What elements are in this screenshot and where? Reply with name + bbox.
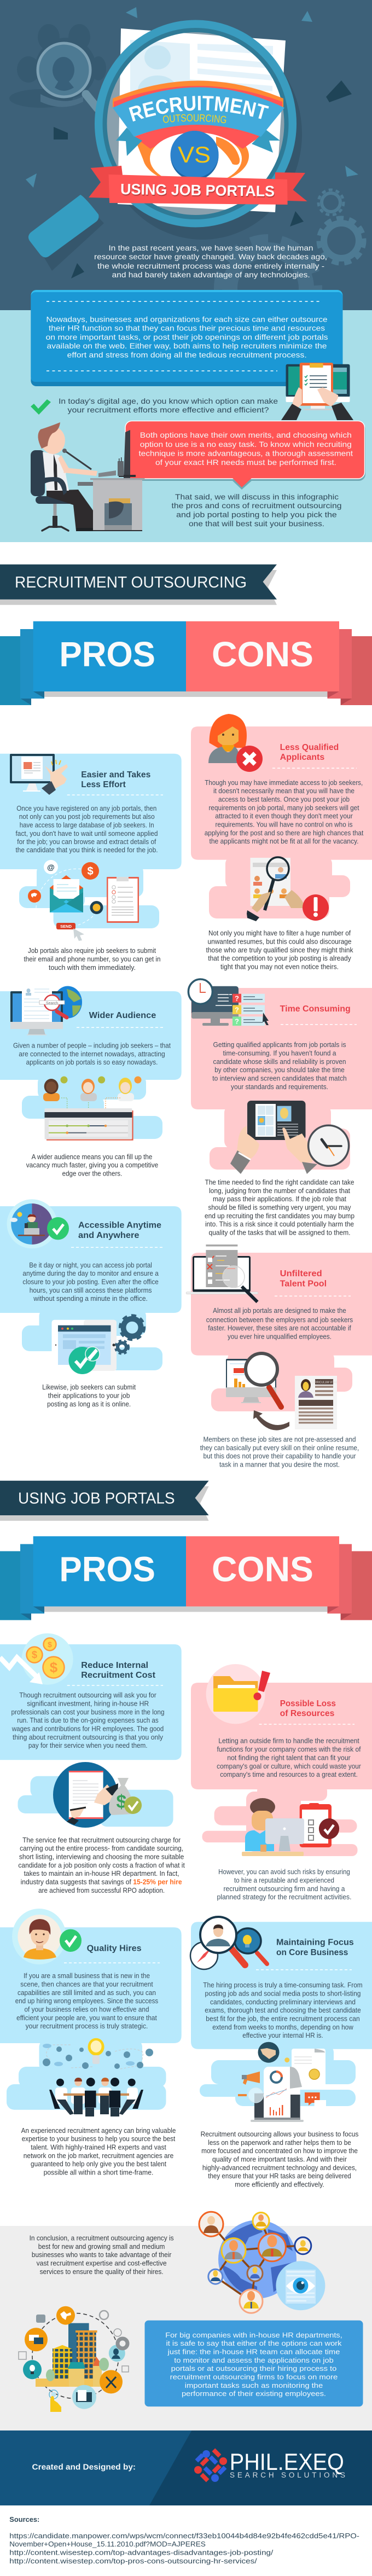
text: description <box>205 779 364 845</box>
text: description: candidate whose skills and reliability is proven <box>213 1058 346 1066</box>
panel: pros and cons banner two <box>0 1536 372 1620</box>
text: heading: on Core Business <box>276 1948 348 1957</box>
text: follow-up: Members on these job sites are not pre-assessed and <box>204 1435 356 1443</box>
text: description: If you are a small business that is new in the <box>24 1972 150 1980</box>
panel: blue big companies box: just fine: the in-house HR team can allocate time <box>167 2348 340 2356</box>
icon: magnifiers with executive, bulb and compass <box>190 1917 267 1969</box>
text: follow-up with savings highlight: are achieved from successful RPO adoption. <box>38 1887 165 1894</box>
text: follow-up: quality of the tasks that will be assigned to them. <box>209 1229 350 1236</box>
text: description: requirements. You will have no control on who is <box>216 821 352 828</box>
text block: digital age question: your recruitment efforts more effective and efficient? <box>68 405 269 414</box>
text: description: requirements on job portal, many job seekers will get <box>209 804 359 812</box>
title: ribbon with recruitment outsourcing <box>113 81 284 178</box>
text: follow-up with savings highlight: The service fee that recruitment outsourcing charge for <box>22 1836 181 1844</box>
icon: woman with cross <box>208 714 263 772</box>
icon: folder with alert <box>206 1664 270 1724</box>
text: follow-up <box>26 1153 158 1177</box>
text: follow-up: into. This is a risk since it could potentially harm the <box>205 1220 354 1228</box>
text: follow-up <box>42 1383 136 1408</box>
text: description <box>206 1307 353 1340</box>
text block: sources: https://candidate.manpower.com/wps/wcm/connect/f33eb10044b4d84e92b4fe462cdd5e41/RPO- <box>9 2532 359 2540</box>
text block: sources: November+Open+House_15.11.2010.pdf?MOD=AJPERES <box>9 2540 206 2548</box>
panel: con time consuming <box>188 979 372 1236</box>
text: heading: Possible Loss <box>280 1699 336 1708</box>
text: follow-up: but this does not prove their capability to handle your <box>204 1452 356 1460</box>
text: description: the candidate that you think is needed for the job. <box>15 846 158 854</box>
text block: intro paragraph: resource sector have greatly changed. Way back decades ago, <box>94 252 327 261</box>
icon: email, clipboard and send button <box>28 860 139 941</box>
panel: pros and cons banner one: PROS <box>59 635 155 674</box>
text: description: functions for your company comes with the risk of <box>217 1746 361 1753</box>
text: heading: Maintaining Focus <box>276 1938 354 1947</box>
text: description: best fit for the job, the entire recruitment process can <box>206 2015 360 2023</box>
panel: blue intro card: Nowadays, businesses and organizations for each size can either outsource <box>46 315 328 324</box>
text: description: you ever hire unqualified employees. <box>228 1333 332 1340</box>
panel: red speech bubble <box>125 421 365 490</box>
text: description: faster. However, these sites are not accountable if <box>208 1324 351 1332</box>
panel: credits footer <box>0 2430 372 2505</box>
panel: credits footer: SEARCH SOLUTIONS <box>230 2471 345 2479</box>
text block: that said <box>172 492 341 528</box>
text: follow-up: long, judging from the number of candidates that <box>209 1187 350 1195</box>
text: description: time-consuming. If you haven't found a <box>223 1049 336 1057</box>
text: heading: Reduce Internal <box>81 1661 148 1670</box>
icon: call agents <box>43 1077 141 1101</box>
text: follow-up: network on the job market, recruitment agencies are <box>24 2152 173 2160</box>
icon: monitor and clipboard with hands <box>281 363 353 420</box>
title: ribbon with recruitment outsourcing: OUTSOURCING <box>163 114 226 124</box>
text: follow-up: they ensure that your HR tasks are being delivered <box>208 2172 351 2180</box>
text: heading <box>280 1269 327 1289</box>
text: heading: Wider Audience <box>89 1011 156 1020</box>
text: follow-up: unwanted resumes, but this could also discourage <box>208 938 352 945</box>
icon: phil.exeq logo <box>194 2449 227 2482</box>
text: heading <box>276 1938 354 1957</box>
text: description: applicants on job portals is so easy nowadays. <box>26 1059 158 1066</box>
panel: blue intro card: on more important tasks, or post their job openings on different job portals <box>46 333 328 341</box>
icon: coins with falling arrow: $ <box>48 1640 52 1649</box>
text: heading: Unfiltered <box>280 1269 322 1278</box>
text: heading: of Resources <box>280 1709 334 1718</box>
text: follow-up with savings highlight: industry data suggests that savings of 15-25% per hire <box>21 1879 182 1886</box>
text: follow-up: posting as long as it is online. <box>47 1400 131 1408</box>
panel: blue big companies box: For big companies with in-house HR departments, <box>165 2331 342 2339</box>
decorative triangles <box>26 7 358 278</box>
panel: blue intro card: available on the web. Either way, both aims to help recruiters minimize the <box>47 341 327 350</box>
panel: blue big companies box: performance of their existing employees. <box>182 2389 326 2398</box>
text: follow-up <box>206 929 353 970</box>
text: description: thing about recruitment outsourcing is that you only <box>13 1734 164 1741</box>
text block: digital age question: In today's digital age, do you know which option can make <box>59 397 278 405</box>
panel: red speech bubble: option to use is a no easy task. To know which recruiting <box>140 440 352 449</box>
title: ribbon with recruitment outsourcing: RECRUITMENT <box>129 96 269 121</box>
text: description: wages and contributions for HR employees. The good <box>11 1725 164 1733</box>
text block: sources: http://content.wisestep.com/top-advantages-disadvantages-job-posting/ <box>9 2549 274 2557</box>
text: follow-up: vacancy much faster, giving you a competitive <box>26 1161 158 1169</box>
panel: credits footer: Created and Designed by: <box>32 2463 136 2472</box>
text: description <box>13 1042 171 1066</box>
text: description: capabilities are still limited and as such, you can <box>18 1989 156 1997</box>
text: description <box>22 1261 159 1302</box>
panel: blue intro card: effort and stress from doing all the tedious recruitment process. <box>67 350 307 359</box>
icon: magnifier over candidate resumes <box>247 857 329 921</box>
text: description: posting job ads and social media posts to short-listing <box>205 1990 361 1998</box>
text: description: Though recruitment outsourcing will ask you for <box>19 1691 156 1699</box>
text: description <box>15 805 158 854</box>
panel: red speech bubble: Both options have their own merits, and choosing which <box>140 431 352 439</box>
text: description: your recruitment process is truly strategic. <box>26 2022 148 2030</box>
heading: recruitment outsourcing banner <box>0 565 277 605</box>
text: description: the applicants might not be fit at all for the vacancy. <box>209 838 359 845</box>
text block: that said: and job portal posting to help you pick the <box>176 510 337 519</box>
icon: clock, monitor and question list: ? <box>235 1005 239 1014</box>
text: follow-up: that the competition to your job posting is already <box>208 955 351 962</box>
text: heading: Applicants <box>280 753 324 762</box>
text: follow-up: planned strategy for the recruitment activities. <box>217 1893 351 1901</box>
text: heading: Less Qualified <box>280 743 339 752</box>
text: follow-up: task in a manner that you desire the most. <box>219 1461 340 1468</box>
text block: sources: Sources: <box>9 2516 39 2523</box>
icon: coins with falling arrow: $ <box>50 1659 58 1676</box>
panel: pro maintaining focus on core business <box>190 1917 372 2188</box>
panel: blue big companies box <box>144 2321 363 2406</box>
text: follow-up: recruitment outsourcing firm and having a <box>223 1885 345 1893</box>
text: description: to interview and screen candidates that match <box>212 1074 347 1082</box>
icon: day and night with check <box>7 1199 69 1248</box>
text: heading <box>81 770 150 789</box>
text: description <box>11 1691 165 1749</box>
panel: header background <box>0 0 372 310</box>
text: description: have access to large database of job seekers. In <box>20 822 154 829</box>
text: follow-up: end up recruiting the first candidates you may bump <box>205 1212 354 1220</box>
text: description: your standards and requirements. <box>231 1083 328 1091</box>
text: description: attracted to it even though they don't meet your <box>215 812 353 820</box>
text: follow-up: An experienced recruitment agency can bring valuable <box>21 2127 176 2135</box>
panel: pro quality hires <box>0 1909 182 2176</box>
text: follow-up: However, you can avoid such risks by ensuring <box>218 1868 350 1876</box>
text block: that said: one that will best suit your business. <box>189 519 324 528</box>
text: description: Once you have registered on any job portals, then <box>16 805 156 812</box>
text: follow-up <box>200 1435 359 1468</box>
icon: clock, monitor and question list <box>188 979 269 1026</box>
text: follow-up: their email and phone number, so you can get in <box>24 955 161 963</box>
icon: man on phone at desk <box>31 422 144 531</box>
icon: worker at monitor with checklist <box>242 1792 339 1856</box>
text: heading <box>280 1699 336 1718</box>
text block: intro paragraph <box>94 243 327 279</box>
text: follow-up: Likewise, job seekers can submit <box>42 1383 136 1391</box>
text: follow-up <box>24 947 161 972</box>
text: heading: Time Consuming <box>280 1004 351 1014</box>
text: description: are connected to the internet nowadays, attracting <box>19 1050 165 1058</box>
panel: con possible loss of resources <box>191 1664 372 1901</box>
text block: conclusion: services to ensure the quality of their hires. <box>40 2268 164 2276</box>
text: heading: Talent Pool <box>280 1279 327 1289</box>
text: heading <box>78 1221 161 1240</box>
icon: laptop with checklist and magnifier <box>186 1245 258 1302</box>
text: description: by other companies, you should take the time <box>214 1066 345 1074</box>
icon: monitor with globe and search <box>10 986 82 1035</box>
text: follow-up: tight that you may not even notice theirs. <box>220 963 339 970</box>
text: heading: Quality Hires <box>87 1944 142 1953</box>
text: follow-up: more efficiently and effectively. <box>235 2180 324 2188</box>
icon: green check <box>31 399 51 415</box>
panel: con unfiltered talent pool <box>186 1245 372 1468</box>
icon: contract signing and money bag: $ <box>117 1792 127 1812</box>
text block: that said: That said, we will discuss in this infographic <box>175 492 339 501</box>
icon: email, clipboard and send button: SEND <box>60 924 72 929</box>
icon: background gears <box>214 188 367 290</box>
icon: tablet with candidate photos and clock <box>230 1101 349 1174</box>
panel: pro reduce internal recruitment cost <box>0 1633 185 1894</box>
text: description: efficient your people are, you want to ensure that <box>16 2014 157 2022</box>
heading: using job portals banner <box>0 1481 209 1521</box>
text: follow-up with savings highlight: takes to maintain an in-house HR department. In fact, <box>24 1870 179 1877</box>
text: follow-up: to hire a reputable and experienced <box>234 1876 334 1884</box>
panel: con less qualified applicants <box>191 714 372 970</box>
icon: people silhouettes with magnifier <box>9 24 106 108</box>
icon: coins with falling arrow: $ <box>32 1649 37 1660</box>
text: follow-up: talent. With highly-trained HR experts and vast <box>31 2143 166 2151</box>
text: description: company's goal or culture, which could waste your <box>217 1763 361 1770</box>
panel: pro wider audience <box>0 986 182 1177</box>
panel: pros and cons banner one <box>0 621 372 705</box>
text: heading <box>81 1661 155 1680</box>
text: heading <box>280 743 339 762</box>
icon: email, clipboard and send button: $ <box>87 865 94 877</box>
text: description: The hiring process is truly a time-consuming task. From <box>203 1981 363 1989</box>
icon: smiling hire with check <box>12 1909 82 1964</box>
text: description: significant investment, hiring in-house HR <box>27 1700 149 1708</box>
text: follow-up <box>205 1178 354 1236</box>
text: heading: Easier and Takes <box>81 770 150 780</box>
text: follow-up with savings highlight: carrying out the entire process- from candidate sourcing, <box>20 1845 183 1852</box>
text: follow-up: expertise to your business to help you source the best <box>22 2135 176 2143</box>
heading: using job portals banner: USING JOB PORTALS <box>18 1490 175 1508</box>
panel: blue big companies box: important tasks such as monitoring the <box>185 2381 323 2389</box>
icon: monitor, magnifier and resume <box>226 1353 338 1431</box>
icon: clock, monitor and question list: ? <box>235 1017 239 1025</box>
text: heading: and Anywhere <box>78 1231 140 1240</box>
text block: intro paragraph: the whole recruitment process was done entirely internally - <box>97 261 324 270</box>
icon: email, clipboard and send button: @ <box>47 863 55 871</box>
panel: blue intro card <box>31 290 342 386</box>
text: description: Almost all job portals are designed to make the <box>213 1307 346 1315</box>
text: description: closure to your job posting. Even after the office <box>22 1278 159 1286</box>
text block: conclusion: best for new and growing small and medium <box>38 2243 165 2251</box>
icon: contract signing and money bag <box>53 1762 142 1828</box>
text: description: end up hiring wrong employees. Since the success <box>15 1997 158 2005</box>
text: description: fact, you don't have to wait until someone applied <box>15 830 158 838</box>
text: description <box>217 1737 361 1778</box>
text: description: run. That is due to the on-going expenses such as <box>17 1717 159 1724</box>
text: description: anytime during the day to monitor and ensure a <box>22 1270 159 1277</box>
icon: lightbulb network over team meeting <box>43 2038 153 2116</box>
icon: city with service circle <box>19 2306 129 2412</box>
panel: pros and cons banner two: PROS <box>59 1550 155 1589</box>
text: description: connection between the employers and job seekers <box>206 1316 353 1324</box>
panel: light blue intro background <box>0 310 372 542</box>
text: follow-up: Not only you might have to filter a huge number of <box>208 929 351 937</box>
text block: conclusion: In conclusion, a recruitment outsourcing agency is <box>30 2234 174 2242</box>
icon: vs badge <box>171 131 219 181</box>
text block: intro paragraph: and had barely taken advantage of any technologies. <box>112 270 310 279</box>
text: follow-up: possible all within a short time-frame. <box>44 2168 153 2176</box>
panel: pro easier and takes less effort <box>0 754 182 972</box>
text: description: Getting qualified applicants from job portals is <box>213 1041 346 1049</box>
text: follow-up: Job portals also require job seekers to submit <box>28 947 156 955</box>
text: description <box>15 1972 158 2030</box>
text: follow-up: more focused and concentrated on how to improve the <box>201 2147 358 2155</box>
text: follow-up: highly-advanced recruitment technology and devices, <box>202 2164 357 2172</box>
text: heading: Recruitment Cost <box>81 1671 155 1680</box>
text: follow-up <box>217 1868 351 1901</box>
text: follow-up: quality of more important tasks. And with their <box>212 2155 347 2163</box>
text: follow-up with savings highlight: candidate for a job position only costs a fraction of what it <box>18 1862 185 1869</box>
icon: vs badge: VS <box>178 142 211 167</box>
panel: pros and cons banner two: CONS <box>212 1550 313 1589</box>
panel: conclusion background <box>0 2226 372 2430</box>
text: description: access to best talents. Once you post your job <box>218 795 350 803</box>
text: follow-up: guaranteed to help only give you the best talent <box>31 2160 166 2168</box>
text: description: it doesn't necessarily mean that you will have the <box>213 787 354 795</box>
icon: monitor with pointing hand <box>10 754 68 795</box>
icon: monitor, magnifier and resume: CURRICULUM VITAE <box>311 1381 338 1384</box>
panel: blue big companies box: it is safe to say that either of the options can work <box>166 2339 342 2347</box>
text: follow-up <box>21 2127 176 2176</box>
text: description: effective your internal HR is. <box>242 2032 323 2039</box>
panel: red speech bubble: of your exact HR needs must be performed first. <box>155 458 336 467</box>
panel: blue big companies box: recruitment outsourcing firms to focus on more <box>170 2373 338 2381</box>
text: description: company's time and resources to a great extent. <box>220 1771 358 1778</box>
text: description: not finding the right talent that can fit your <box>227 1754 351 1761</box>
text: follow-up: they can basically put every skill on their online resume, <box>200 1444 359 1452</box>
title: using job portals ribbon <box>89 166 307 205</box>
icon: browser with progress tracks <box>45 1098 133 1141</box>
text: description: extend from weeks to months, depending on how <box>212 2023 354 2031</box>
text: follow-up: The time needed to find the right candidate can take <box>205 1178 354 1186</box>
text: description: hours, you can still access these platforms <box>30 1287 152 1294</box>
text: follow-up: Recruitment outsourcing allows your business to focus <box>201 2130 358 2138</box>
text: follow-up: touch with them immediately. <box>49 964 136 972</box>
text block: sources <box>9 2516 359 2565</box>
text: description: of your business relies on how effective and <box>24 2005 149 2013</box>
icon: monitor with globe and search: Search <box>46 1002 58 1005</box>
text: follow-up with savings highlight <box>18 1836 185 1894</box>
text: follow-up <box>201 2130 358 2188</box>
panel: blue big companies box: portals or at outsourcing their hiring process to <box>171 2364 336 2373</box>
text: description: professionals can cost your business more in the long <box>11 1708 165 1716</box>
icon: global talent network <box>199 2212 325 2313</box>
text: description: not only can you post job requirements but also <box>19 813 155 821</box>
text: description: applying for the post and so there are high chances that <box>205 829 364 837</box>
text: description: Though you may have immediate access to job seekers, <box>205 779 363 787</box>
text: description: for the job; you can browse and extract details of <box>17 838 156 846</box>
text: follow-up: edge over the others. <box>62 1170 122 1177</box>
text: follow-up: less on the paperwork and rather helps them to be <box>208 2139 351 2147</box>
text: description: candidates, conducting preliminary interviews and <box>210 1998 356 2006</box>
text: description: scene, then chances are that your recruitment <box>20 1980 153 1988</box>
title: using job portals ribbon: USING JOB PORTALS <box>120 181 275 200</box>
text: follow-up: should be filled is something very urgent, you may <box>208 1203 351 1211</box>
icon: coins with falling arrow <box>0 1633 73 1685</box>
text: heading: Accessible Anytime <box>78 1221 161 1230</box>
text: description: Given a number of people – including job seekers – that <box>13 1042 171 1049</box>
text: follow-up: those who are truly qualified since they might think <box>206 946 353 954</box>
text: follow-up: may pass their applications. If the job role that <box>213 1195 346 1203</box>
icon: clock, monitor and question list: ? <box>235 995 239 1002</box>
panel: pros and cons banner one: CONS <box>212 635 313 674</box>
icon: tablet with gears and check <box>51 1316 144 1374</box>
panel: credits footer: PHIL.EXEQ <box>230 2449 344 2475</box>
panel: pro accessible anytime and anywhere <box>0 1199 182 1408</box>
panel: blue intro card: their HR function so that they can focus their precious time and resources <box>49 324 325 333</box>
text: description <box>203 1981 363 2039</box>
text: follow-up: their applications to your job <box>48 1392 130 1399</box>
text block: conclusion: vast recruitment expertise and cost-effective <box>37 2259 167 2267</box>
text: follow-up: A wider audience means you can fill up the <box>32 1153 152 1161</box>
text block: intro paragraph: In the past recent years, we have seen how the human <box>108 243 313 252</box>
icon: magnifier lens with resume <box>98 24 302 240</box>
icon: tablet, handshake and marketing items <box>238 2042 326 2122</box>
text block: digital age question <box>59 397 278 414</box>
text block: that said: the pros and cons of recruitment outsourcing <box>172 501 341 510</box>
text block: conclusion: businesses who wants to take advantage of their <box>32 2251 171 2259</box>
heading: recruitment outsourcing banner: RECRUITMENT OUTSOURCING <box>15 574 247 591</box>
panel: red speech bubble: technique is more advantageous, a thorough assessment <box>139 449 353 457</box>
text: follow-up with savings highlight: short listing, interviewing and choosing the more suitable <box>19 1853 184 1861</box>
text: description: Letting an outside firm to handle the recruitment <box>218 1737 359 1745</box>
text block: conclusion <box>30 2234 174 2276</box>
text: description: without spending a minute in the office. <box>33 1295 148 1302</box>
text: description <box>212 1041 347 1091</box>
panel: blue big companies box: to monitor and assess the applications on job <box>174 2356 334 2364</box>
text: description: Be it day or night, you can access job portal <box>29 1261 152 1269</box>
text: description: exams, thorough test and choosing the best candidate <box>205 2007 361 2014</box>
text: description: pay for their service when you need them. <box>28 1742 148 1749</box>
icon: magnifier handle <box>28 195 104 271</box>
text block: sources: http://content.wisestep.com/top-pros-cons-outsourcing-hr-services/ <box>9 2557 257 2565</box>
text: heading: Less Effort <box>81 780 126 789</box>
